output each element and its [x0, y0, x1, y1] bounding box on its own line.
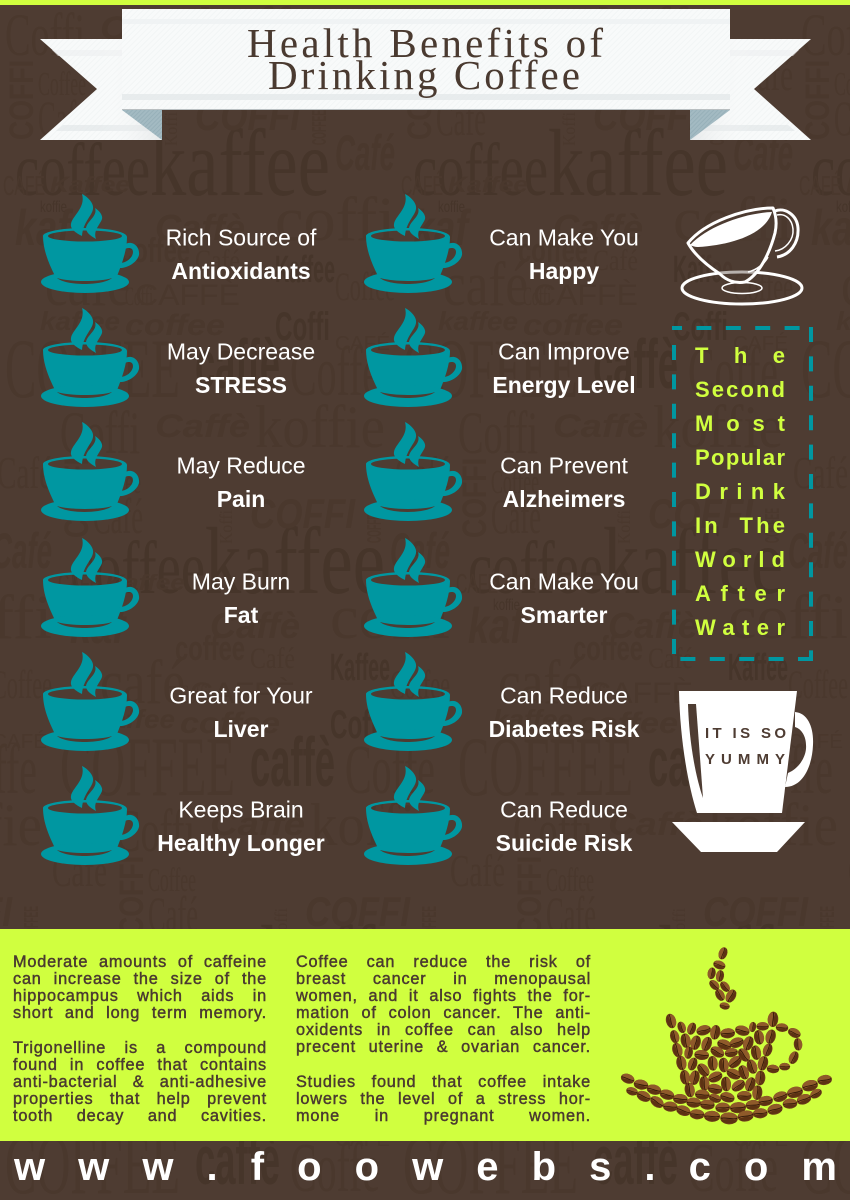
- text block: cancer fact: precent uterine & ovarian cancer.: [296, 1038, 591, 1056]
- ribbon main band: [122, 9, 730, 110]
- title: [247, 20, 603, 98]
- callout text: Most: [695, 411, 786, 436]
- callout text: Drink: [695, 479, 786, 504]
- text block: hippocampus fact: Moderate amounts of caffeine: [13, 953, 267, 971]
- benefit text: Alzheimers: [503, 486, 625, 512]
- panel: lime facts: [0, 929, 850, 1141]
- footer background with coffee words: [196, 1142, 786, 1184]
- icon: coffee cup: [364, 652, 462, 751]
- benefit text: Healthy Longer: [157, 830, 325, 856]
- icon: coffee cup: [41, 538, 139, 637]
- icon: coffee cup: [41, 422, 139, 521]
- callout text: The: [695, 343, 785, 368]
- icon: coffee cup: [41, 652, 139, 751]
- text block: trigonelline fact: Trigonelline is a compound: [13, 1039, 267, 1057]
- text block: stress hormone fact: [296, 1073, 591, 1125]
- text block: hippocampus fact: [13, 953, 267, 1022]
- text block: cancer fact: mation of colon cancer. The anti-: [296, 1004, 591, 1022]
- ribbon right tail: [690, 39, 811, 140]
- callout text: Second: [695, 377, 785, 402]
- text block: trigonelline fact: properties that help prevent: [13, 1090, 267, 1108]
- benefit text: [500, 452, 629, 512]
- callout text: After: [695, 581, 785, 606]
- benefit text: [169, 682, 313, 742]
- callout: second most popular drink: [672, 327, 813, 659]
- benefit: May Burn Fat: [41, 538, 290, 637]
- benefit text: Can Reduce: [500, 796, 628, 822]
- icon: coffee cup: [364, 766, 462, 865]
- benefit text: [496, 796, 633, 856]
- text block: cancer fact: breast cancer in menopausal: [296, 970, 591, 988]
- benefit: Can Prevent Alzheimers: [364, 422, 629, 521]
- benefit text: Energy Level: [492, 372, 636, 398]
- icon: coffee cup: [41, 766, 139, 865]
- mug text: IT IS SO: [705, 725, 786, 742]
- title: Health Benefits of: [247, 20, 603, 66]
- benefit text: Can Reduce: [500, 682, 628, 708]
- benefit text: Smarter: [521, 602, 608, 628]
- text block: hippocampus fact: can increase the size of the: [13, 970, 267, 988]
- benefit text: [489, 568, 639, 628]
- benefit text: Fat: [224, 602, 259, 628]
- benefit: Can Improve Energy Level: [364, 308, 636, 407]
- benefit: Great for Your Liver: [41, 652, 313, 751]
- benefit text: Can Make You: [489, 224, 639, 250]
- benefit text: Can Make You: [489, 568, 639, 594]
- benefit text: [489, 224, 639, 284]
- benefit: Rich Source of Antioxidants: [41, 194, 317, 293]
- title ribbon: [40, 9, 811, 140]
- benefit text: [176, 452, 306, 512]
- text block: trigonelline fact: anti-bacterial & anti-adhesive: [13, 1073, 267, 1091]
- text block: stress hormone fact: Studies found that coffee intake: [296, 1073, 591, 1091]
- benefit text: Can Improve: [498, 338, 630, 364]
- benefit text: [157, 796, 325, 856]
- icon: coffee cup: [41, 308, 139, 407]
- benefit text: May Decrease: [167, 338, 315, 364]
- illustration: cup made of coffee beans: [620, 947, 832, 1124]
- benefit: May Decrease Stress: [41, 308, 315, 407]
- top accent bar: [0, 0, 850, 5]
- benefit: Can Make You Happy: [364, 194, 639, 293]
- ribbon left tail: [40, 39, 162, 140]
- mug text: YUMMY: [705, 751, 785, 768]
- benefit text: Antioxidants: [171, 258, 311, 284]
- icon: coffee cup: [364, 538, 462, 637]
- benefit text: May Burn: [192, 568, 290, 594]
- benefit text: Diabetes Risk: [489, 716, 640, 742]
- icon: white mug with saucer: [672, 691, 813, 852]
- dashed teal frame: [672, 327, 813, 659]
- benefit text: Keeps Brain: [178, 796, 304, 822]
- icon: white outlined cup and saucer: [682, 208, 802, 304]
- benefit: Keeps Brain Healthy Longer: [41, 766, 325, 865]
- benefit text: Suicide Risk: [496, 830, 633, 856]
- icon: coffee cup: [364, 194, 462, 293]
- text block: trigonelline fact: tooth decay and cavities.: [13, 1107, 267, 1125]
- benefit text: Great for Your: [169, 682, 313, 708]
- callout text: World: [695, 547, 785, 572]
- icon: coffee cup: [41, 194, 139, 293]
- text block: trigonelline fact: found in coffee that contains: [13, 1056, 267, 1074]
- callout text: In The: [695, 513, 785, 538]
- benefit: Can Reduce Diabetes Risk: [364, 652, 640, 751]
- benefit text: [192, 568, 290, 628]
- benefit text: [167, 338, 315, 398]
- benefit text: Liver: [214, 716, 269, 742]
- benefit text: Rich Source of: [166, 224, 317, 250]
- text block: trigonelline fact: [13, 1039, 267, 1125]
- benefit: Can Make You Smarter: [364, 538, 639, 637]
- benefit text: Pain: [217, 486, 265, 512]
- text block: cancer fact: [296, 953, 591, 1056]
- text block: stress hormone fact: mone in pregnant women.: [296, 1107, 591, 1125]
- callout text: [695, 343, 786, 640]
- icon: coffee cup: [364, 308, 462, 407]
- callout text: Water: [695, 615, 785, 640]
- title: Drinking Coffee: [268, 52, 580, 98]
- benefit text: Can Prevent: [500, 452, 629, 478]
- text block: cancer fact: women, and it also fights the for-: [296, 987, 591, 1005]
- benefit text: [166, 224, 317, 284]
- benefit text: STRESS: [195, 372, 287, 398]
- benefit text: May Reduce: [176, 452, 306, 478]
- benefit text: [489, 682, 640, 742]
- benefit: Can Reduce Suicide Risk: [364, 766, 633, 865]
- text block: stress hormone fact: lowers the level of a stress hor-: [296, 1090, 591, 1108]
- benefit text: [492, 338, 636, 398]
- callout text: Popular: [695, 445, 785, 470]
- text block: cancer fact: Coffee can reduce the risk of: [296, 953, 591, 971]
- text block: hippocampus fact: short and long term memory.: [13, 1004, 267, 1022]
- text block: cancer fact: oxidents in coffee can also help: [296, 1021, 591, 1039]
- text block: hippocampus fact: hippocampus which aids in: [13, 987, 267, 1005]
- benefit text: Happy: [529, 258, 599, 284]
- icon: coffee cup: [364, 422, 462, 521]
- footer website url: w w w . f o o w e b s . c o m: [14, 1145, 837, 1189]
- benefit: May Reduce Pain: [41, 422, 306, 521]
- mug text: [705, 725, 786, 768]
